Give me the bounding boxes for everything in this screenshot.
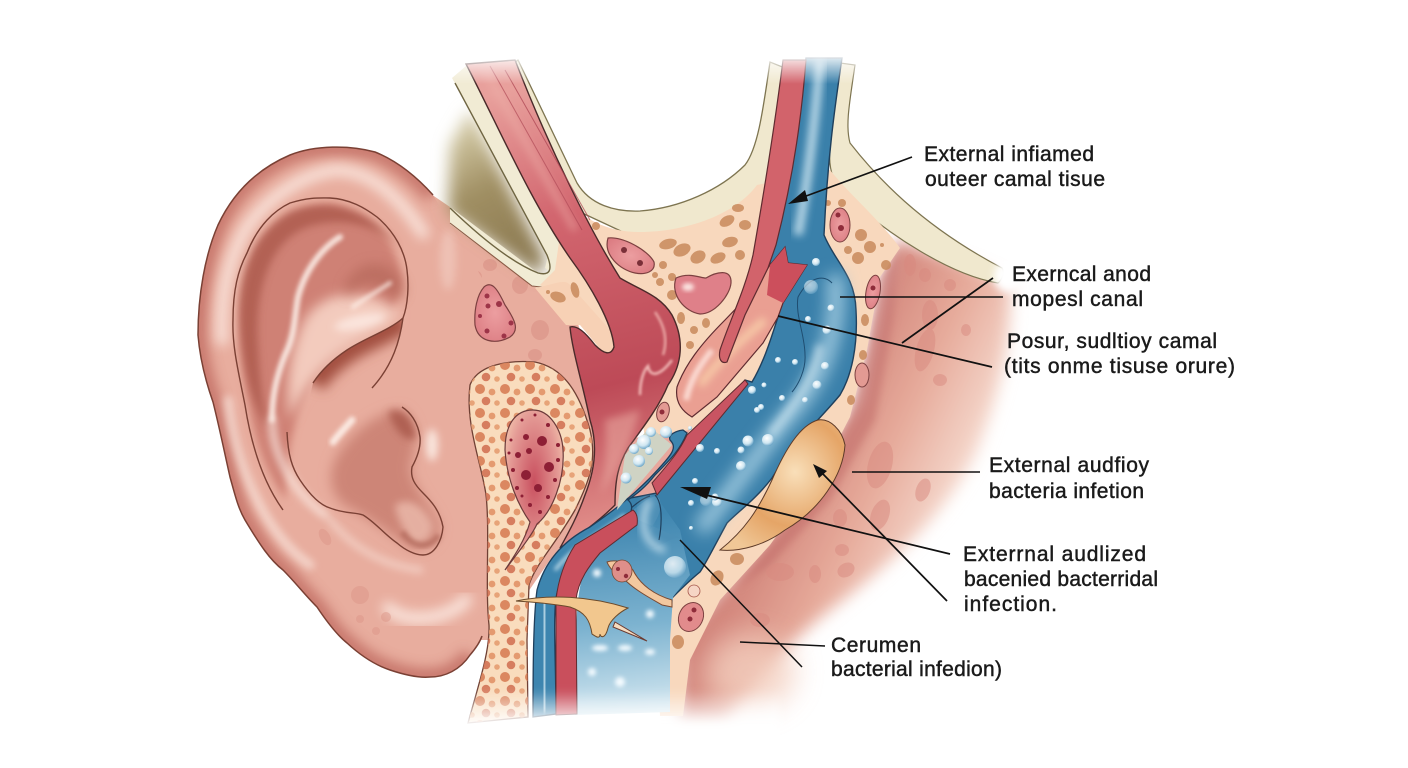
- tissue: right pink soft tissue: [680, 240, 1010, 725]
- label: external inflamed tissue: outeer camal tisue: [925, 168, 1105, 191]
- label: external canal: [1012, 263, 1151, 311]
- tissue: left pink tissue behind the ear: [425, 190, 620, 640]
- label: external bacterial infection: Exterrnal audlized: [963, 543, 1146, 566]
- label: cerumen: [831, 634, 1002, 681]
- label: external bacterial infection: infection.: [964, 593, 1057, 616]
- label: posterior auditory canal: (tits onme tisuse orure): [1004, 355, 1235, 378]
- blue canal: lower chamber: [575, 495, 690, 715]
- arrow: bacterial infection centre: [680, 487, 950, 554]
- brown dots: [546, 199, 891, 649]
- label: external bacterial infection: bacenied bacterridal: [964, 568, 1158, 591]
- bubbles in canal: [664, 258, 834, 578]
- ear: pale antihelix lobe: [288, 294, 397, 420]
- infographic: ear canal anatomy diagram: [197, 57, 1234, 724]
- cell: branch with nuclei: [607, 561, 672, 607]
- line: external auditory bacteria: [852, 471, 980, 473]
- line: tissue diagonal: [902, 278, 993, 343]
- bone band: upper cream layer: [505, 60, 790, 240]
- line: cerumen: [740, 642, 825, 646]
- soft fades at the open edges: [436, 44, 1022, 750]
- label: cerumen: bacterial infedion): [831, 658, 1002, 681]
- label: external canal: Exerncal anod: [1012, 263, 1151, 286]
- orange oval inflammation: [720, 420, 845, 550]
- inflamed pink bulb and red flag: [677, 247, 807, 417]
- ear: concha cavity: [331, 410, 440, 549]
- red lining stripes: [556, 380, 748, 715]
- red upper strip: [719, 60, 806, 362]
- label: cerumen: Cerumen: [831, 634, 921, 657]
- ear: inner contour lines: [233, 198, 443, 555]
- peach connective tissue: [535, 170, 900, 716]
- ear: lobe spots: [316, 527, 391, 635]
- cerumen wax plug: [516, 597, 647, 641]
- blue canal: thin outer layer: [533, 430, 687, 717]
- line: external canal: [840, 296, 1003, 298]
- arrow: bacterial infection oval: [813, 464, 947, 601]
- arrow: external inflamed tissue: [788, 157, 912, 204]
- leader lines and arrows: [680, 157, 1003, 667]
- label: external auditory bacteria: [989, 454, 1150, 503]
- cells: vessels and small cross-sections: [475, 208, 883, 636]
- label: external auditory bacteria: External audfioy: [989, 454, 1150, 477]
- blue canal: main upper chamber: [620, 58, 856, 597]
- label: posterior auditory canal: [1004, 330, 1235, 378]
- bubble cluster near canal fold: [617, 426, 672, 510]
- line: posterior auditory canal: [778, 316, 992, 367]
- bone band: right cream layer: [830, 62, 1003, 283]
- cavity: cream wall upper right: [452, 66, 572, 287]
- bacterial sac: [505, 410, 563, 570]
- pink under canal fold: [565, 430, 690, 548]
- ear: scapha dark fold: [240, 204, 402, 500]
- ear: helix and antihelix highlights: [222, 170, 466, 618]
- cavity: cream wall lower: [450, 207, 569, 288]
- ear: soft pale highlights: [333, 230, 456, 461]
- ear: outer auricle: [198, 147, 495, 677]
- line: bacterial infection lower: [680, 540, 802, 667]
- label: external canal: mopesl canal: [1012, 288, 1143, 311]
- red tube: upper left inflamed tissue: [466, 60, 680, 548]
- label: external auditory bacteria: bacteria infetion: [989, 480, 1144, 503]
- label: external bacterial infection: [963, 543, 1158, 616]
- spongy bone column: [468, 362, 593, 723]
- ear: outer contour: [198, 147, 482, 677]
- ear: shading clipped to ear: [198, 147, 470, 677]
- label: posterior auditory canal: Posur, sudltioy camal: [1007, 330, 1217, 353]
- ear: dark wedge under antihelix: [313, 318, 403, 383]
- label: external inflamed tissue: [924, 143, 1105, 191]
- olive cavity and bone band: [448, 66, 572, 288]
- label: external inflamed tissue: External infiamed: [924, 143, 1094, 166]
